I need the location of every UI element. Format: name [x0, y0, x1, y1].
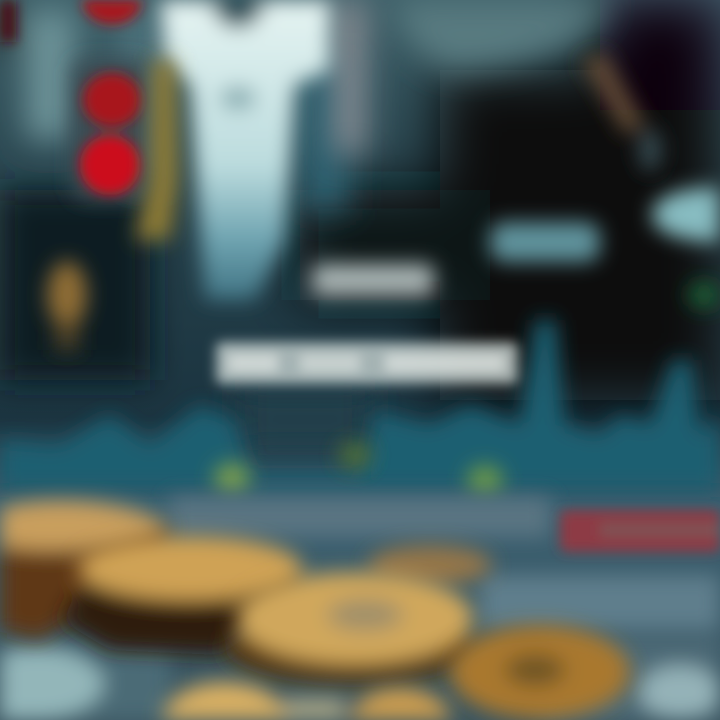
icon: stack of gold coins [0, 500, 630, 720]
coin: back right [368, 545, 492, 585]
coin: right [450, 625, 630, 719]
coin: second [60, 536, 302, 655]
icon: amber glow on left [47, 261, 87, 350]
panel: lower data strip [0, 497, 720, 720]
green chart markers [214, 442, 503, 495]
coin: bottom centre [162, 682, 452, 720]
brown diagonal bar [580, 52, 662, 172]
arc: grey teal top shape [335, 0, 610, 155]
panel: dark left side [0, 0, 370, 450]
gold accent strip [135, 60, 178, 240]
callout: teal glowing labels [490, 188, 720, 308]
panel: dark upper right [300, 0, 720, 400]
heading: blurred title line two [216, 342, 518, 384]
heading: blurred title line one [312, 264, 434, 296]
chart: teal market bars [0, 320, 720, 490]
bar: red ticker [560, 510, 720, 552]
icon: white necktie shape [160, 0, 330, 300]
coin: far left [0, 500, 170, 640]
coin: centre [225, 572, 475, 684]
icon: red signal lights [0, 0, 150, 200]
